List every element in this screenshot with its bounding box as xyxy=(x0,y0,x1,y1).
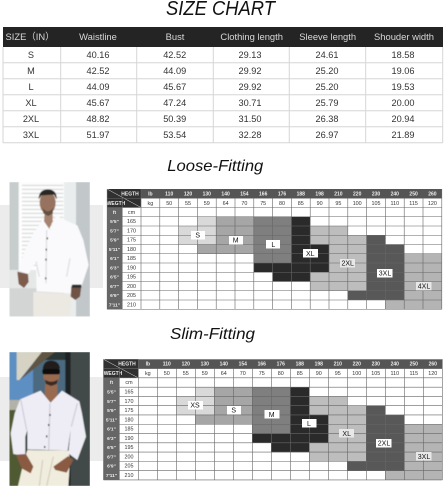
size regions xyxy=(104,359,442,480)
chart header: 198 xyxy=(315,191,324,197)
table row L: L xyxy=(28,82,34,92)
height column: 7'11" xyxy=(106,473,117,479)
table header: Clothing length xyxy=(220,31,283,42)
table row 3XL: 21.89 xyxy=(392,130,414,140)
photo band: loose-fitting xyxy=(0,205,103,288)
label XL: XL xyxy=(306,251,315,258)
chart header: 176 xyxy=(277,362,285,368)
heading: slim-fitting: Slim-Fitting xyxy=(170,326,255,343)
height column: 180 xyxy=(127,247,136,253)
chart header: 85 xyxy=(297,371,303,377)
label 2XL: 2XL xyxy=(378,441,390,448)
table row M: 19.06 xyxy=(392,66,414,76)
table row S xyxy=(28,50,414,60)
height column: 6'5" xyxy=(107,445,116,451)
table row XL: 47.24 xyxy=(163,98,186,108)
table row M: 29.92 xyxy=(238,66,262,76)
chart header: 120 xyxy=(184,191,192,197)
height column: 5'5" xyxy=(107,390,116,396)
table row 3XL: 53.54 xyxy=(163,130,186,140)
height column xyxy=(104,378,134,480)
chart header: 115 xyxy=(410,371,418,377)
chart header: lb xyxy=(148,191,153,197)
table header: Shouder width xyxy=(374,31,434,42)
table row M: 44.09 xyxy=(163,66,186,76)
chart header: 110 xyxy=(391,371,399,377)
chart header: 85 xyxy=(298,201,304,207)
chart header: 120 xyxy=(428,201,437,207)
height column: 195 xyxy=(124,445,134,451)
height column: 5'7" xyxy=(110,228,119,234)
chart header: 100 xyxy=(352,371,361,377)
chart header: 95 xyxy=(335,371,341,377)
chart header: 140 xyxy=(221,191,230,197)
label M: M xyxy=(233,238,239,245)
table row XL: 45.67 xyxy=(86,98,110,108)
height column: ft xyxy=(110,380,113,386)
chart header: HEGTH xyxy=(118,362,136,368)
chart header: WEGTH xyxy=(104,371,123,377)
chart header: 59 xyxy=(202,371,208,377)
table grid xyxy=(3,47,443,143)
chart header: 70 xyxy=(241,201,247,207)
table row 2XL: 50.39 xyxy=(163,114,186,124)
height column: 210 xyxy=(124,473,134,479)
chart header: HEGTH xyxy=(121,191,139,197)
table row S: 40.16 xyxy=(86,50,110,60)
height column: 200 xyxy=(127,284,136,290)
height column: 6'3" xyxy=(107,436,116,442)
table row L: 29.92 xyxy=(238,82,262,92)
height column: 6'3" xyxy=(110,266,119,272)
chart header: 220 xyxy=(353,191,362,197)
chart header: 75 xyxy=(259,371,265,377)
height column: 165 xyxy=(124,390,134,396)
chart header: 64 xyxy=(223,201,229,207)
chart header: 130 xyxy=(201,362,209,368)
chart header: 154 xyxy=(239,362,247,368)
chart header: 64 xyxy=(221,371,227,377)
chart header: 110 xyxy=(163,362,171,368)
table header: SIZE（IN） xyxy=(6,31,54,42)
height column: 6'1" xyxy=(107,427,116,433)
chart header: lb xyxy=(146,362,150,368)
label L xyxy=(302,419,316,428)
table row 2XL xyxy=(23,114,414,124)
table row L xyxy=(28,82,414,92)
chart header: 250 xyxy=(410,362,418,368)
height column: 5'9" xyxy=(110,238,119,244)
height column: 6'5" xyxy=(110,275,119,281)
chart: loose-fitting size grid xyxy=(107,189,442,309)
label S: S xyxy=(231,408,236,415)
chart header: 210 xyxy=(334,191,343,197)
table row M xyxy=(27,66,414,76)
height column: 170 xyxy=(124,399,134,405)
label XL xyxy=(339,429,354,438)
label XS: XS xyxy=(190,403,200,410)
table row S: S xyxy=(28,50,34,60)
size table xyxy=(3,27,443,143)
photo: man in loose white shirt xyxy=(9,182,90,317)
chart header: 120 xyxy=(428,371,437,377)
label L: L xyxy=(271,242,275,249)
label L xyxy=(266,240,280,249)
chart header: 188 xyxy=(297,191,305,197)
height column: 190 xyxy=(127,266,136,272)
table row 3XL: 26.97 xyxy=(316,130,338,140)
label 2XL xyxy=(340,259,355,268)
table header: Waistline xyxy=(79,31,117,42)
chart header: 154 xyxy=(240,191,249,197)
chart header: 240 xyxy=(391,191,399,197)
height column: 180 xyxy=(124,417,134,423)
chart header: 90 xyxy=(317,201,323,207)
label 3XL: 3XL xyxy=(418,454,430,461)
table header: Bust xyxy=(166,31,185,42)
label 3XL xyxy=(377,269,392,278)
height column: 205 xyxy=(124,464,134,470)
chart header: 176 xyxy=(278,191,286,197)
chart header: WEGTH xyxy=(107,201,126,207)
table row XL xyxy=(25,98,414,108)
label XL: XL xyxy=(342,431,351,438)
table row L: 44.09 xyxy=(86,82,110,92)
chart header: 55 xyxy=(185,201,191,207)
height column: 165 xyxy=(127,219,136,225)
height column: cm xyxy=(125,380,133,386)
chart header: 50 xyxy=(164,371,170,377)
chart header: kg xyxy=(145,371,151,377)
label M xyxy=(264,410,280,419)
chart header: 110 xyxy=(165,191,173,197)
chart header: 210 xyxy=(334,362,342,368)
chart header: 100 xyxy=(353,201,362,207)
label L: L xyxy=(307,421,311,428)
height column: 6'1" xyxy=(110,256,119,262)
table row M: 25.20 xyxy=(316,66,338,76)
label S xyxy=(227,406,241,415)
height column: 5'7" xyxy=(107,399,116,405)
chart header: 105 xyxy=(371,371,380,377)
chart header: 80 xyxy=(279,201,285,207)
table row 2XL: 31.50 xyxy=(238,114,262,124)
chart header: kg xyxy=(148,201,153,207)
label 4XL xyxy=(416,282,432,291)
label 3XL xyxy=(416,452,432,461)
height column: 5'5" xyxy=(110,219,119,225)
chart header: 75 xyxy=(260,201,266,207)
chart header: 80 xyxy=(278,371,284,377)
chart header: 95 xyxy=(335,201,341,207)
chart header xyxy=(104,359,442,378)
chart header: 120 xyxy=(182,362,190,368)
label XS xyxy=(188,401,203,410)
table row L: 45.67 xyxy=(163,82,186,92)
chart: slim-fitting size grid xyxy=(104,359,442,480)
table row XL: 20.00 xyxy=(392,98,414,108)
table row XL: 30.71 xyxy=(238,98,262,108)
height column: 6'9" xyxy=(107,464,116,470)
height column: ft xyxy=(113,210,116,216)
chart header: 55 xyxy=(183,371,189,377)
table row S: 29.13 xyxy=(238,50,262,60)
heading: loose-fitting: Loose-Fitting xyxy=(167,158,263,175)
height column: 5'9" xyxy=(107,408,116,414)
table header: Sleeve length xyxy=(299,31,356,42)
table row 2XL: 20.94 xyxy=(392,114,414,124)
height column xyxy=(107,208,136,309)
height column: 6'7" xyxy=(107,454,116,460)
table row 2XL: 2XL xyxy=(23,114,39,124)
table row 3XL: 32.28 xyxy=(238,130,262,140)
size regions xyxy=(107,189,442,309)
chart header: 240 xyxy=(391,362,399,368)
chart header: 140 xyxy=(220,362,228,368)
label M: M xyxy=(269,412,275,419)
height column: 185 xyxy=(124,427,134,433)
height column: 190 xyxy=(124,436,134,442)
table row 3XL: 51.97 xyxy=(86,130,110,140)
table row 3XL xyxy=(23,130,414,140)
table row 2XL: 48.82 xyxy=(86,114,110,124)
chart header: 70 xyxy=(240,371,246,377)
table header xyxy=(3,27,443,47)
photo: man in slim white shirt xyxy=(9,352,90,486)
height column: 6'9" xyxy=(110,293,119,299)
chart header: 110 xyxy=(391,201,399,207)
chart header: 115 xyxy=(409,201,418,207)
height column: 205 xyxy=(127,293,136,299)
table row S: 18.58 xyxy=(392,50,414,60)
label 4XL: 4XL xyxy=(418,284,430,291)
height column: 175 xyxy=(124,408,134,414)
chart header: 260 xyxy=(429,362,437,368)
height column: 5'11" xyxy=(109,247,120,253)
height column: 185 xyxy=(127,256,136,262)
chart header: 59 xyxy=(204,201,210,207)
label 2XL xyxy=(376,439,392,448)
chart header: 230 xyxy=(372,362,380,368)
chart header: 105 xyxy=(372,201,380,207)
table row M: 42.52 xyxy=(86,66,110,76)
chart header: 188 xyxy=(296,362,304,368)
table row S: 24.61 xyxy=(316,50,338,60)
height column: 175 xyxy=(127,238,136,244)
height column: 210 xyxy=(127,302,136,308)
chart header: 90 xyxy=(316,371,322,377)
height column: 5'11" xyxy=(106,417,117,423)
height column: 7'11" xyxy=(109,302,120,308)
label S: S xyxy=(195,233,200,240)
label S xyxy=(191,231,205,240)
chart header: 166 xyxy=(258,362,266,368)
table row L: 25.20 xyxy=(316,82,338,92)
chart header xyxy=(107,189,442,208)
table row XL: 25.79 xyxy=(316,98,338,108)
table row 3XL: 3XL xyxy=(23,130,39,140)
chart header: 50 xyxy=(166,201,172,207)
table row XL: XL xyxy=(25,98,37,108)
chart header: 166 xyxy=(259,191,268,197)
chart header: 250 xyxy=(409,191,418,197)
table row S: 42.52 xyxy=(163,50,186,60)
photo band: slim-fitting xyxy=(0,377,103,461)
chart header: 198 xyxy=(315,362,323,368)
table row 2XL: 26.38 xyxy=(316,114,338,124)
height column: 170 xyxy=(127,228,136,234)
chart header: 230 xyxy=(372,191,380,197)
height column: 195 xyxy=(127,275,136,281)
chart header: 260 xyxy=(428,191,437,197)
height column: 6'7" xyxy=(110,284,119,290)
chart header: 220 xyxy=(353,362,361,368)
table row M: M xyxy=(27,66,35,76)
table row L: 19.53 xyxy=(392,82,414,92)
height column: cm xyxy=(128,210,136,216)
label 2XL: 2XL xyxy=(341,261,354,268)
height column: 200 xyxy=(124,454,134,460)
label XL xyxy=(303,249,318,258)
label 3XL: 3XL xyxy=(379,271,391,278)
chart header: 130 xyxy=(203,191,211,197)
label M xyxy=(229,236,243,245)
